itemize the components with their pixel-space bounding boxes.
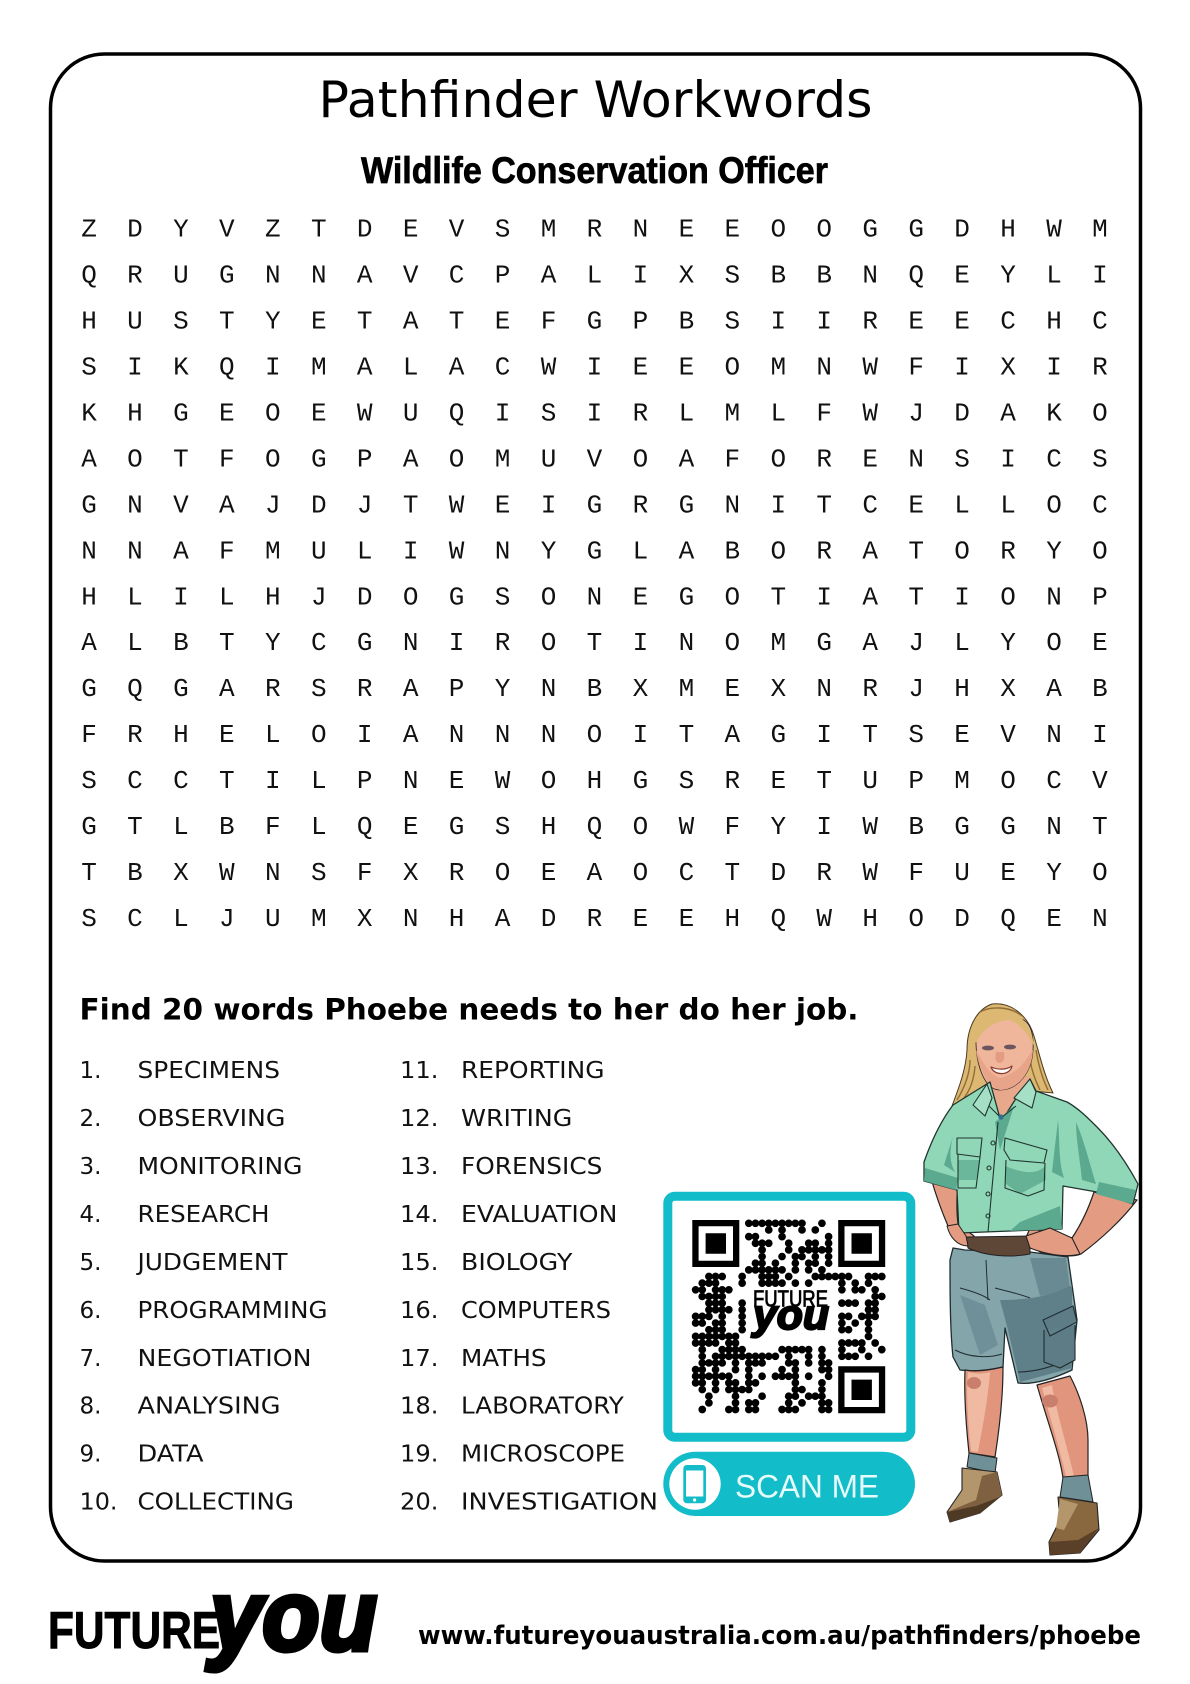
icon: phone [683,1465,706,1503]
word list column 2: COMPUTERS [461,1298,611,1324]
scan me button [663,1452,915,1516]
fringe [972,1010,1034,1046]
word list column 2: 18. [400,1394,438,1420]
instruction heading: Find 20 words Phoebe needs to her do her job. [80,992,859,1026]
breast pockets [957,1106,1047,1232]
subtitle: Wildlife Conservation Officer [361,150,828,191]
word list column 2: INVESTIGATION [461,1490,658,1516]
word list column 2: MATHS [461,1346,547,1372]
word search letter grid: HLILHJDOGSONEGOTIATIONP [81,582,1138,612]
QR centre logo: you [751,1291,829,1338]
left leg [965,1367,1003,1457]
right leg highlight [1042,1385,1074,1476]
word list column 1: RESEARCH [138,1202,270,1228]
word list column 1: 5. [80,1250,101,1276]
eyes [982,1045,1016,1050]
word list column 2: LABORATORY [461,1394,625,1420]
QR code panel [668,1196,911,1437]
left boot [947,1468,1002,1522]
word list column 2: 13. [400,1154,438,1180]
right hand [1026,1228,1080,1256]
QR centre logo: FUTURE [753,1286,828,1312]
right leg [1037,1376,1088,1478]
word list column 2: 17. [400,1346,438,1372]
word list column 2: 14. [400,1202,438,1228]
collar [973,1079,1036,1116]
word search letter grid: KHGEOEWUQISIRLMLFWJDAKO [81,398,1138,428]
word search letter grid: ZDYVZTDEVSMRNEEOOGGDHWM [81,214,1138,244]
word list column 2 [400,1058,658,1516]
word list column 2: BIOLOGY [461,1250,573,1276]
word list column 1: 6. [80,1298,101,1324]
scan me button: SCAN ME [735,1468,879,1504]
left arm [931,1178,974,1245]
QR finder: top left [692,1220,739,1267]
word search letter grid: FRHELOIANNNOITAGITSEVNI [81,720,1138,750]
word list column 1 [80,1058,328,1516]
shirt [924,1079,1138,1233]
word list column 1: OBSERVING [138,1106,286,1132]
belt [966,1236,1030,1256]
shorts [950,1248,1077,1383]
word list column 2: WRITING [461,1106,572,1132]
word search letter grid: GNVAJDJTWEIGRGNITCELLOC [81,490,1138,520]
word search letter grid [81,214,1138,934]
word search letter grid: AOTFOGPAOMUVOAFORENSICS [81,444,1138,474]
face [976,1018,1033,1090]
QR finder: top right [838,1220,885,1267]
word list column 1: SPECIMENS [138,1058,280,1084]
word list column 2: FORENSICS [461,1154,602,1180]
QR finder: bottom right [838,1366,885,1413]
word list column 2: 20. [400,1490,438,1516]
knees [967,1377,1058,1408]
logo: FutureYou: you [205,1560,377,1672]
smile [991,1066,1012,1074]
left leg highlight [967,1372,990,1452]
word list column 1: 8. [80,1394,101,1420]
word search letter grid: TBXWNSFXROEAOCTDRWFUEYO [81,858,1138,888]
cheek and chin shading [976,1050,1033,1090]
word list column 1: 10. [80,1490,118,1516]
QR finder centres [706,1233,872,1400]
word search letter grid: SCLJUMXNHADREEHQWHODQEN [81,904,1138,934]
word list column 2: 12. [400,1106,438,1132]
word list column 1: ANALYSING [138,1394,280,1420]
right arm [1025,1192,1137,1256]
word list column 1: COLLECTING [138,1490,294,1516]
word list column 2: REPORTING [461,1058,604,1084]
shorts creases [955,1260,1072,1372]
word search letter grid: SCCTILPNEWOHGSRETUPMOCV [81,766,1138,796]
word search letter grid: GTLBFLQEGSHQOWFYIWBGGNT [81,812,1138,842]
word list column 2: 15. [400,1250,438,1276]
cargo pocket [1043,1306,1077,1368]
left hand [947,1224,968,1246]
logo: FutureYou [48,1560,377,1672]
word list column 1: 9. [80,1442,101,1468]
neck [985,1076,1034,1126]
word list column 1: NEGOTIATION [138,1346,312,1372]
word list column 1: 1. [80,1058,101,1084]
word list column 2: 11. [400,1058,438,1084]
word search letter grid: QRUGNNAVCPALIXSBBNQEYLI [81,260,1138,290]
website url: www.futureyouaustralia.com.au/pathfinders/phoebe [418,1621,1141,1651]
word list column 1: MONITORING [138,1154,302,1180]
shorts shading [960,1258,1072,1382]
left sock [967,1453,997,1473]
hair [952,1004,1053,1106]
word search letter grid: ALBTYCGNIROTINOMGAJLYOE [81,628,1138,658]
word list column 1: 4. [80,1202,101,1228]
word list column 2: EVALUATION [461,1202,617,1228]
hair strands [957,1008,1048,1100]
word list column 2: MICROSCOPE [461,1442,625,1468]
word list column 1: 7. [80,1346,101,1372]
character illustration: Phoebe [924,1004,1138,1555]
word list column 1: 2. [80,1106,101,1132]
nose [995,1052,1004,1063]
word search letter grid: SIKQIMALACWIEEOMNWFIXIR [81,352,1138,382]
word list column 1: JUDGEMENT [135,1250,289,1276]
word list column 2: 16. [400,1298,438,1324]
word list column 1: DATA [138,1442,204,1468]
word list column 1: PROGRAMMING [138,1298,328,1324]
QR data dots [696,1223,882,1410]
word search letter grid: NNAFMULIWNYGLABORATORYO [81,536,1138,566]
word search letter grid: HUSTYETATEFGPBSIIREECHC [81,306,1138,336]
right boot [1049,1497,1099,1555]
necklace pendant [998,1114,1004,1120]
word list column 2: 19. [400,1442,438,1468]
word list column 1: 3. [80,1154,101,1180]
right sock [1060,1475,1093,1502]
logo: FutureYou: FUTURE [48,1602,220,1660]
shirt shading [924,1106,1136,1231]
word search letter grid: GQGARSRAPYNBXMEXNRJHXAB [81,674,1138,704]
title: Pathfinder Workwords [318,71,872,129]
